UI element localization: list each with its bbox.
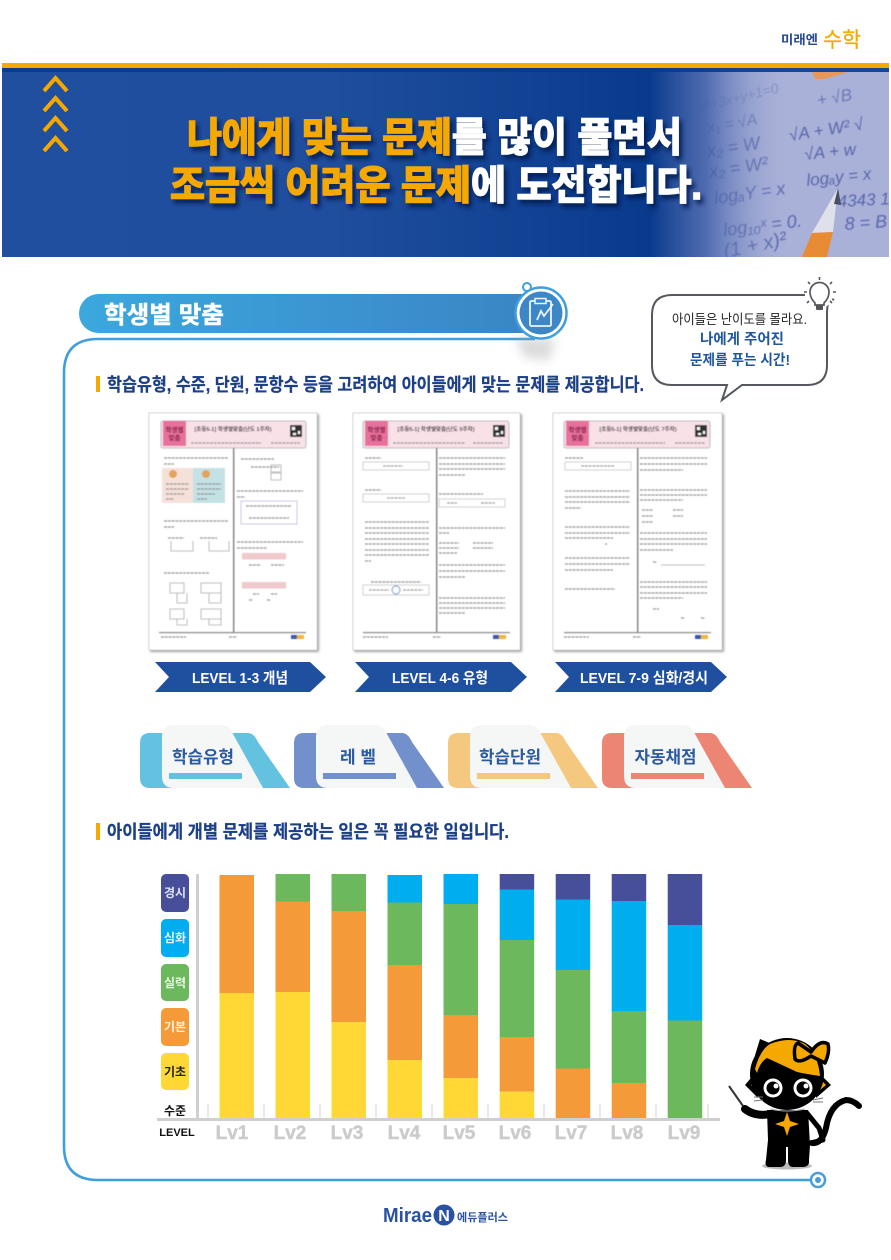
x-axis labels: Lv7 (555, 1123, 587, 1144)
worksheet header (363, 421, 509, 448)
worksheet header: [초등5-1] 학생별맞춤(난도 1주차) (194, 425, 272, 433)
banner photo: math notebook: √A + W² √ (788, 114, 866, 145)
bar Lv1 (220, 875, 254, 1118)
banner photo: math notebook: logₐY = x (713, 178, 788, 208)
stacked bar chart (157, 874, 720, 1144)
brand logo: 미래엔 수학: 미래엔 (781, 32, 818, 47)
worksheet header: [초등5-1] 학생별맞춤(난도 5주차) (397, 425, 475, 433)
banner photo: math notebook (650, 68, 891, 263)
worksheet header: 학생별 (166, 425, 183, 434)
x-axis labels: Lv9 (668, 1123, 700, 1144)
banner title (170, 116, 702, 208)
level arrow 2 (355, 662, 527, 692)
x-axis labels: Lv1 (216, 1123, 249, 1144)
callout bubble (652, 277, 836, 400)
panel end dot (811, 1173, 825, 1187)
brand logo: 미래엔 수학 (781, 29, 861, 52)
tag: 학습단원 (448, 725, 598, 788)
icon: clipboard badge (516, 283, 566, 338)
mascot: black cat with orange hair and pointer (729, 1038, 859, 1170)
panel frame line (64, 339, 812, 1180)
tag: 레벨: 레 벨 (340, 748, 376, 767)
legend: levels: 기본 (164, 1019, 186, 1034)
x-axis labels: Lv6 (499, 1123, 531, 1144)
icon: four chevrons (44, 78, 67, 151)
banner photo: math notebook: x₂ = W² (707, 153, 770, 182)
tag: 레벨 (294, 725, 444, 788)
x-axis labels: Lv5 (443, 1123, 476, 1144)
bar Lv8 (612, 874, 646, 1118)
subheading 2: 아이들에게 개별 문제를 제공하는 일은 꼭 필요한 일입니다. (107, 822, 509, 842)
section heading: 학생별 맞춤 (79, 283, 566, 360)
worksheet 2 (353, 413, 520, 650)
level arrow 3: LEVEL 7-9 심화/경시 (580, 670, 708, 687)
level arrow 2: LEVEL 4-6 유형 (392, 670, 488, 687)
banner photo: math notebook: 8 = B (844, 211, 888, 234)
legend: levels: 수준 (164, 1104, 186, 1118)
worksheet header: 맞춤 (371, 433, 382, 442)
legend: levels: 심화 (164, 930, 186, 945)
level arrow 1: LEVEL 1-3 개념 (192, 670, 288, 687)
worksheet header (564, 421, 710, 448)
level arrow 1 (155, 662, 326, 692)
x-axis labels: Lv4 (388, 1123, 421, 1144)
x-axis labels: Lv2 (274, 1123, 306, 1144)
brand logo: 미래엔 수학: 수학 (823, 29, 861, 52)
banner photo: math notebook: x₂ = W (705, 133, 763, 161)
footer logo: Mirae N 에듀플러스: Mirae (383, 1205, 432, 1227)
footer logo: Mirae N 에듀플러스: N (438, 1208, 450, 1225)
bar Lv4 (388, 875, 422, 1118)
tag: 학습유형 (140, 725, 290, 788)
bar Lv5 (444, 874, 478, 1118)
banner photo: math notebook: x²+3x+y+1=0 (696, 80, 780, 115)
banner title: 조금씩 어려운 문제에 도전합니다. (170, 164, 702, 208)
legend: levels: LEVEL (159, 1127, 195, 1139)
worksheet 3 (553, 413, 722, 650)
banner photo: math notebook: x₁ = √A (705, 111, 759, 137)
worksheet header: [초등5-1] 학생별맞춤(난도 7주차) (599, 425, 677, 433)
banner photo: math notebook: √A + w (803, 139, 859, 164)
tag: 학습단원: 학습단원 (479, 748, 541, 767)
x-axis labels: Lv8 (611, 1123, 643, 1144)
tag: 자동채점 (602, 725, 752, 788)
bar Lv9 (668, 874, 702, 1118)
banner photo: math notebook: (1 + x)² (721, 228, 790, 263)
worksheet header: 학생별 (368, 425, 385, 434)
x-axis labels: Lv3 (331, 1123, 363, 1144)
banner photo: math notebook: + √B (815, 85, 853, 110)
bar Lv7 (556, 874, 590, 1118)
tag: 자동채점: 자동채점 (634, 748, 696, 767)
section heading: 학생별 맞춤: 학생별 맞춤 (104, 302, 224, 329)
callout bubble: 나에게 주어진 (700, 331, 784, 348)
banner title: 나에게 맞는 문제를 많이 풀면서 (187, 116, 682, 160)
bar Lv2 (276, 874, 310, 1118)
footer logo: Mirae N 에듀플러스: 에듀플러스 (457, 1211, 508, 1224)
tag: 학습유형: 학습유형 (172, 748, 234, 767)
bar Lv3 (332, 874, 366, 1118)
worksheet header: 맞춤 (572, 433, 583, 442)
bar Lv6 (500, 874, 534, 1118)
worksheet header: 학생별 (569, 425, 586, 434)
subheading 1: 학습유형, 수준, 단원, 문항수 등을 고려하여 아이들에게 맞는 문제를 제공합니다. (107, 375, 644, 395)
legend: levels (159, 874, 195, 1139)
level arrow 3 (555, 662, 727, 692)
legend: levels: 경시 (164, 886, 186, 900)
legend: levels: 실력 (164, 976, 186, 990)
banner photo: math notebook: logₐy = x (805, 164, 873, 190)
worksheet header: 맞춤 (169, 433, 180, 442)
worksheet 1 (149, 413, 317, 650)
banner (2, 63, 891, 263)
x-axis labels (216, 1123, 700, 1144)
callout bubble: 아이들은 난이도를 몰라요. (672, 312, 807, 327)
callout bubble: 문제를 푸는 시간! (690, 352, 790, 369)
legend: levels: 기초 (164, 1064, 186, 1079)
icon: light bulb (804, 277, 836, 310)
banner photo: math notebook: log₁₀ˣ = 0. (722, 211, 803, 240)
footer logo: Mirae N 에듀플러스 (383, 1204, 508, 1227)
worksheet header (161, 421, 306, 448)
